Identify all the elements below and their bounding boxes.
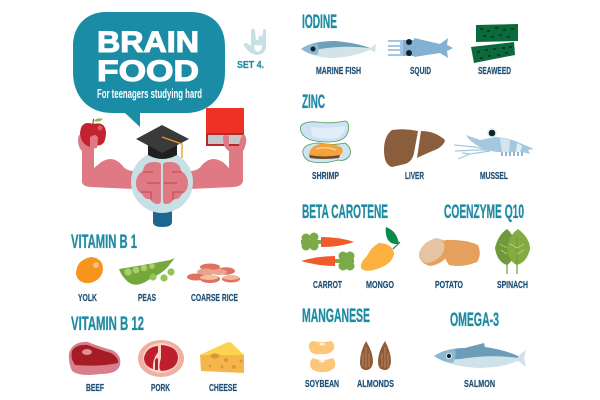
heading: omega-3: OMEGA-3 <box>450 309 499 331</box>
speech bubble title: BRAIN <box>97 26 199 59</box>
label: pork: PORK <box>151 382 170 394</box>
label: soybean: SOYBEAN <box>305 378 339 390</box>
icon: shrimp <box>454 128 534 159</box>
icon: hand sign <box>244 28 266 55</box>
book <box>206 108 244 146</box>
label: shrimp: SHRIMP <box>312 170 339 182</box>
label: beef: BEEF <box>86 382 104 394</box>
heading: zinc: ZINC <box>302 91 325 113</box>
label: mango: MONGO <box>366 279 394 291</box>
icon: liver <box>384 129 445 167</box>
label: cheese: CHEESE <box>209 382 237 394</box>
label: coarse rice: COARSE RICE <box>191 292 238 304</box>
left hand finger over apple <box>90 135 98 149</box>
heading: vitamin b12: VITAMIN B 12 <box>71 313 144 335</box>
icon: marine fish <box>301 41 376 58</box>
brain <box>136 162 188 204</box>
speech bubble title: FOOD <box>97 55 199 88</box>
label: almonds: ALMONDS <box>357 378 394 390</box>
heading: iodine: IODINE <box>302 11 337 33</box>
icon: beef <box>69 342 120 375</box>
base of bulb <box>153 208 172 227</box>
icon: salmon <box>434 343 526 368</box>
heading: vitamin b1: VITAMIN B 1 <box>71 231 137 253</box>
graduation cap <box>136 125 189 159</box>
heading: manganese: MANGANESE <box>302 305 370 327</box>
heading: beta carotene: BETA CAROTENE <box>302 201 388 223</box>
icon: mango <box>361 227 400 271</box>
icon: mussel shell <box>300 121 350 163</box>
arms <box>78 133 134 189</box>
character: brain with muscular arms <box>78 108 246 227</box>
set label: SET 4. <box>237 60 264 71</box>
icon: cheese <box>200 342 244 373</box>
label: spinach: SPINACH <box>497 279 528 291</box>
icon: squid <box>388 38 453 58</box>
icon: soybeans <box>309 341 335 372</box>
label: potato: POTATO <box>435 279 463 291</box>
icon: coarse rice <box>187 264 240 283</box>
icon: peas <box>119 258 175 285</box>
icon: pork <box>138 340 184 377</box>
icon: spinach <box>495 229 530 274</box>
bulb circle <box>131 151 193 213</box>
label: peas: PEAS <box>138 292 156 304</box>
label: mussel: MUSSEL <box>480 170 508 182</box>
icon: seaweed <box>471 24 518 63</box>
label: yolk: YOLK <box>78 292 97 304</box>
icon: almonds <box>360 341 391 370</box>
label: marine fish: MARINE FISH <box>316 65 361 77</box>
label: liver: LIVER <box>405 170 424 182</box>
icon: carrots <box>301 232 354 270</box>
label: seaweed: SEAWEED <box>478 65 511 77</box>
label: salmon: SALMON <box>464 378 495 390</box>
speech bubble title: For teenagers studying hard <box>97 86 202 101</box>
heading: coenzyme q10: COENZYME Q10 <box>444 201 524 223</box>
label: carrot: CARROT <box>313 279 342 291</box>
speech bubble title <box>73 12 225 127</box>
label: squid: SQUID <box>410 65 431 77</box>
apple <box>80 118 106 147</box>
icon: potato <box>419 238 480 266</box>
icon: yolk <box>76 257 103 283</box>
